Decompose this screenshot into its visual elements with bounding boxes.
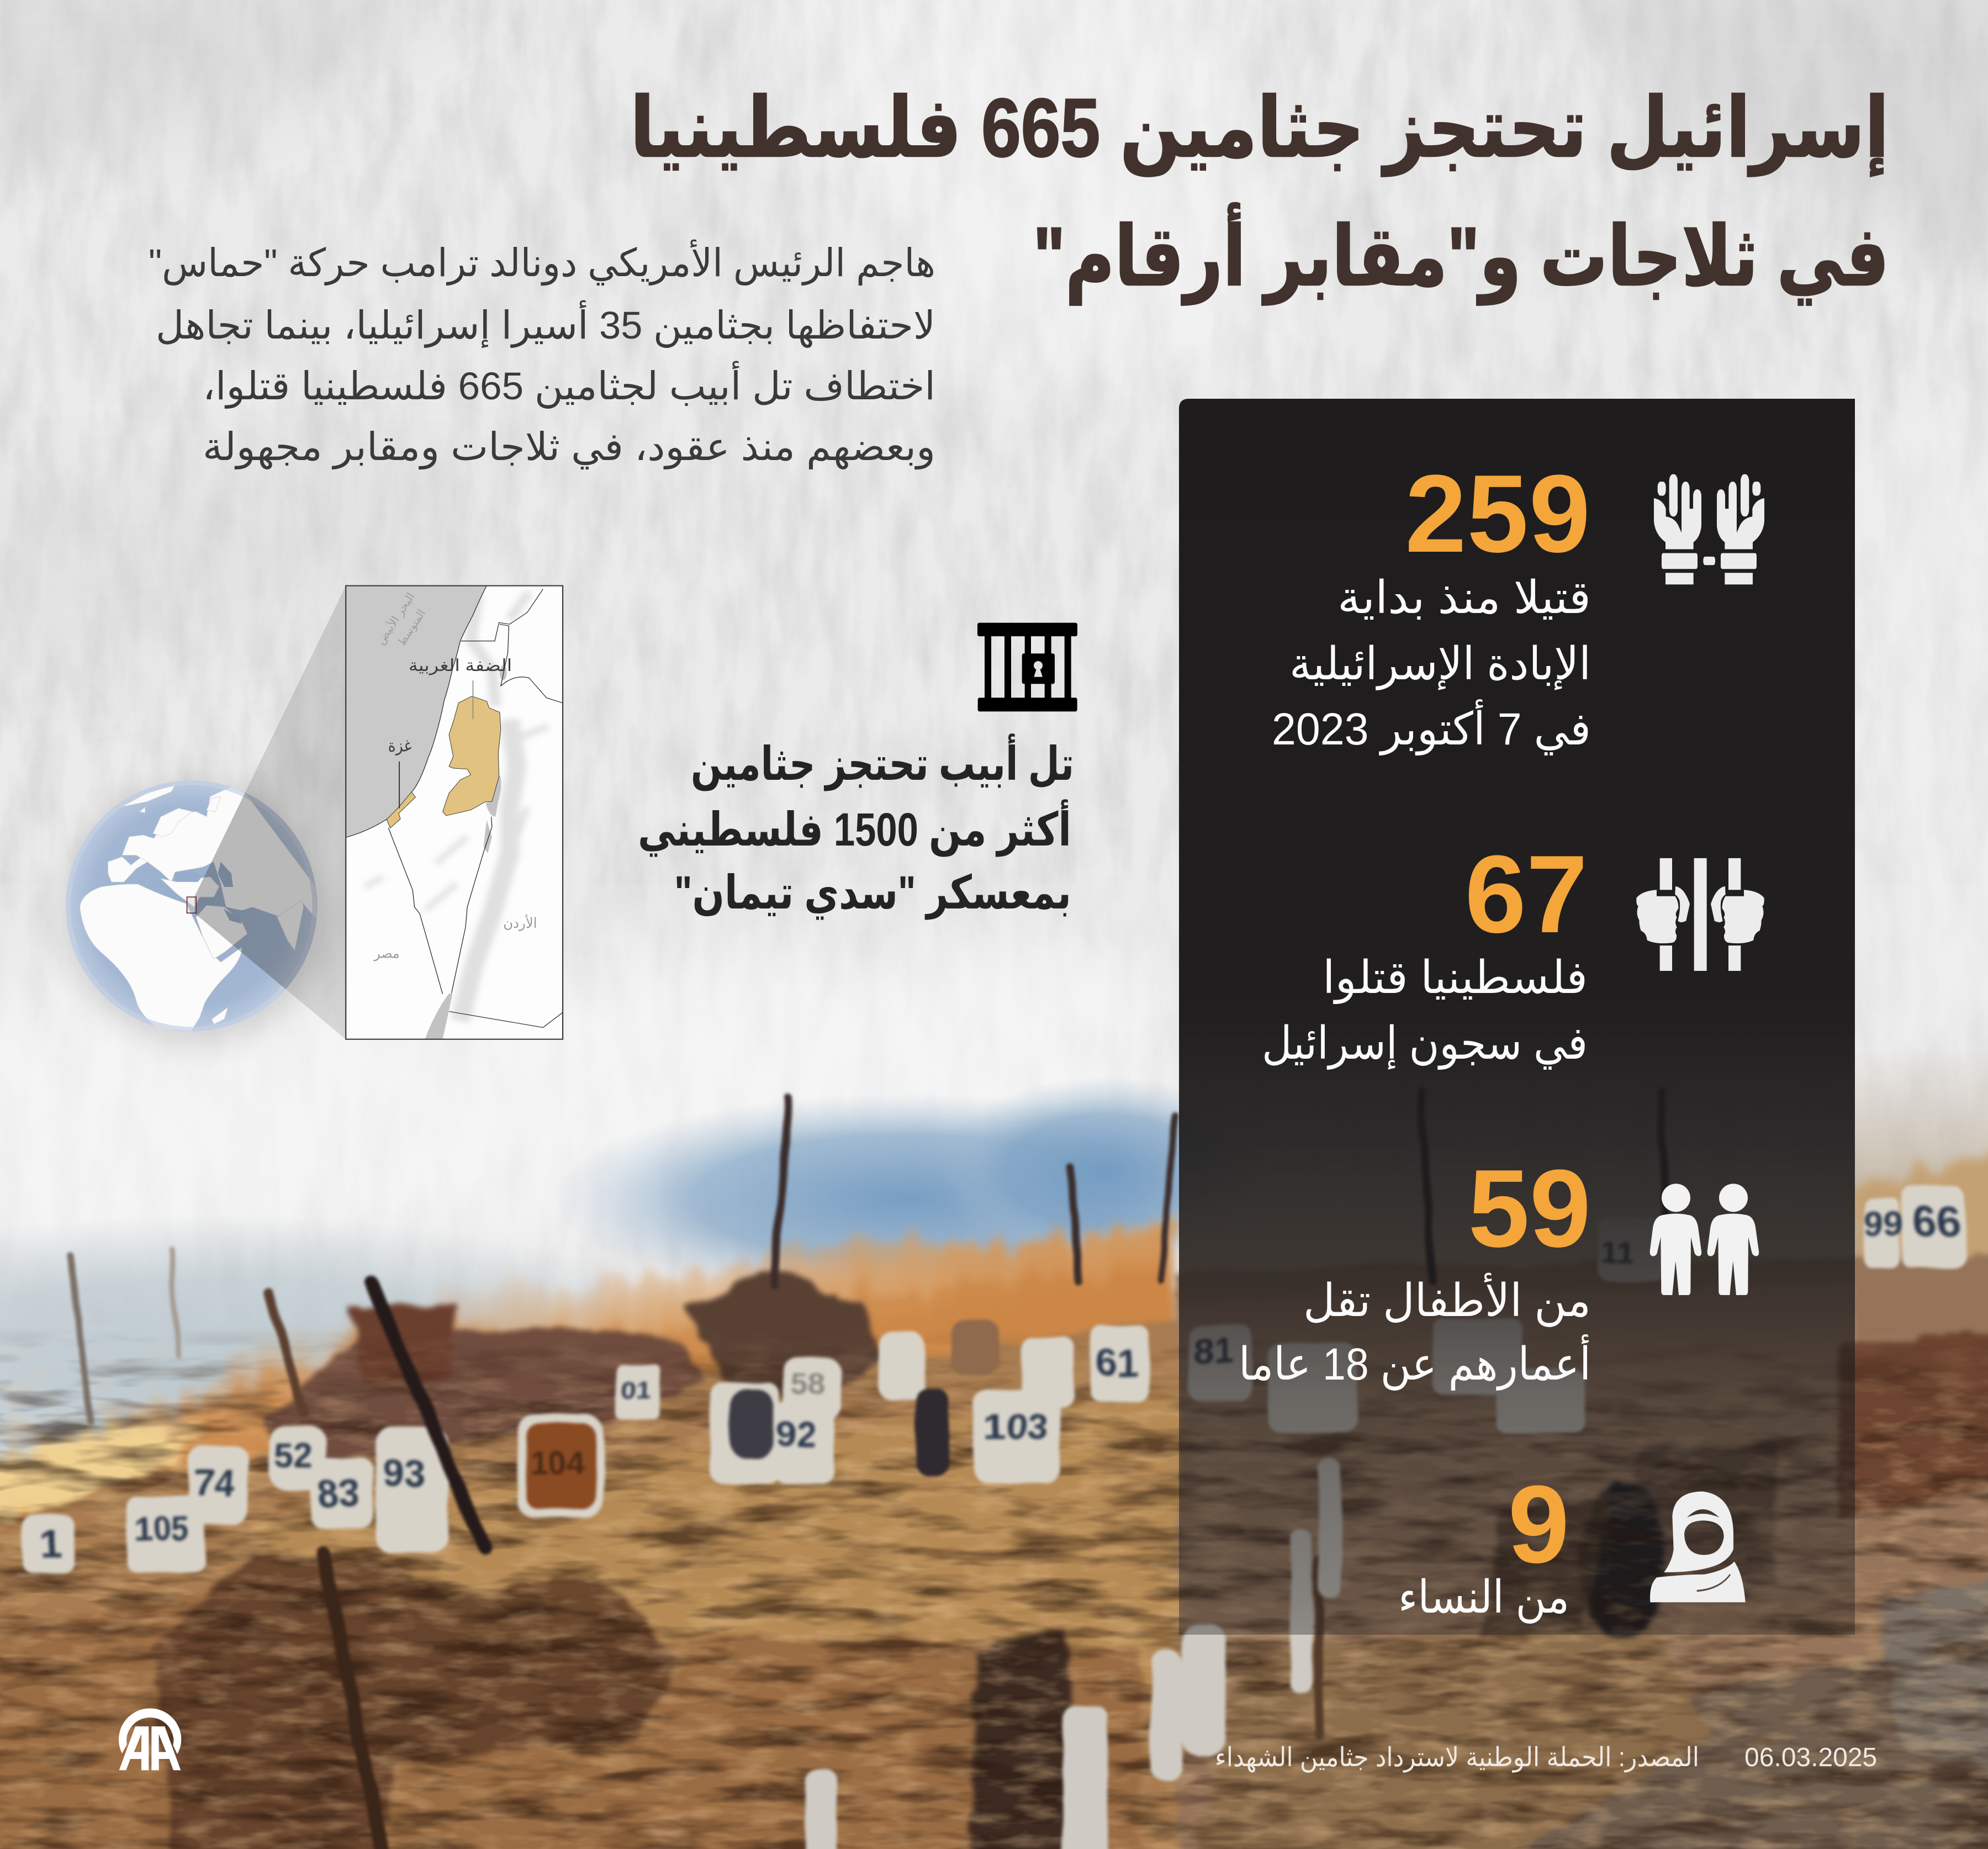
background: painted cemetery landscape: 61 [1096, 1341, 1138, 1384]
title: إسرائيل تحتجز جثامين 665 فلسطينيا [630, 81, 1889, 177]
background: painted cemetery landscape [0, 1049, 1988, 1849]
background: painted cemetery landscape: 83 [317, 1472, 359, 1515]
globe and locator map [64, 586, 563, 1044]
background: painted cemetery landscape: 1 [40, 1523, 62, 1565]
stat 3 number: 59 [1468, 1147, 1591, 1270]
intro paragraph: لاحتفاظها بجثامين 35 أسيرا إسرائيليا، بينما تجاهل [156, 300, 935, 348]
background: painted cemetery landscape: 81 [1194, 1331, 1234, 1371]
stat 3 label [1239, 1273, 1591, 1391]
intro paragraph: هاجم الرئيس الأمريكي دونالد ترامب حركة "حماس" [149, 239, 935, 286]
background: painted cemetery landscape: 52 [274, 1435, 313, 1475]
icon: hands gripping prison bars [1636, 858, 1764, 971]
stat 2 label: في سجون إسرائيل [1262, 1018, 1588, 1070]
grave markers [23, 1186, 1965, 1572]
callout: Sde Teiman detainees [638, 733, 1074, 920]
background: painted cemetery landscape: 99 [1864, 1205, 1904, 1244]
stat 2 label [1262, 953, 1588, 1070]
stat 4 number: 9 [1508, 1463, 1569, 1586]
stat 1 label [1272, 573, 1591, 756]
stat 1 label: قتيلا منذ بداية [1337, 573, 1591, 623]
map label: Mediterranean [373, 590, 428, 648]
icon: two children [1650, 1184, 1759, 1295]
background: painted cemetery landscape: 103 [984, 1405, 1048, 1447]
stat 3 label: أعمارهم عن 18 عاما [1239, 1334, 1591, 1391]
background: painted cemetery landscape: 93 [383, 1452, 425, 1494]
map label: Mediterranean: البحر الأبيض [373, 590, 417, 647]
icon: locked cell bars [977, 623, 1077, 711]
background: painted cemetery landscape: 104 [530, 1444, 585, 1481]
stat 1 number: 259 [1405, 452, 1591, 575]
background: painted cemetery landscape: 58 [791, 1367, 825, 1402]
intro paragraph [149, 239, 935, 470]
icon: veiled woman [1650, 1492, 1746, 1602]
background: painted cemetery landscape: 01 [621, 1375, 649, 1404]
map label: Egypt: مصر [373, 946, 400, 961]
West Bank [443, 696, 501, 816]
source line: المصدر: الحملة الوطنية لاسترداد جثامين الشهداء [1215, 1743, 1699, 1773]
icon: handcuffed hands [1654, 474, 1764, 584]
globe [66, 586, 346, 1039]
callout: Sde Teiman detainees: بمعسكر "سدي تيمان" [674, 867, 1071, 920]
globe shadow [64, 780, 328, 1044]
Mediterranean Sea [346, 586, 487, 837]
callout: Sde Teiman detainees: أكثر من 1500 فلسطيني [638, 799, 1071, 857]
background: painted cemetery landscape: 92 [776, 1413, 816, 1453]
stat 2 number: 67 [1465, 833, 1588, 956]
ground base [0, 1255, 1988, 1849]
stat 4 label: من النساء [1398, 1572, 1569, 1624]
map panel [346, 586, 563, 1039]
map label: Mediterranean: المتوسط [395, 607, 428, 648]
logo: Anadolu Agency [119, 1708, 181, 1770]
map label: Jordan: الأردن [503, 914, 537, 931]
stat 3 label: من الأطفال تقل [1303, 1273, 1591, 1327]
white posts [806, 1458, 1341, 1849]
stat 2 label: فلسطينيا قتلوا [1323, 953, 1588, 1004]
intro paragraph: وبعضهم منذ عقود، في ثلاجات ومقابر مجهولة [203, 425, 935, 470]
date: 06.03.2025 [1744, 1743, 1877, 1772]
Gaza [387, 792, 415, 828]
background: painted cemetery landscape: 66 [1912, 1197, 1960, 1246]
map label: West Bank: الضفة الغربية [409, 656, 512, 675]
wooden crosses [70, 1091, 1667, 1849]
panel: dark statistics panel [1179, 399, 1855, 1635]
background: painted cemetery landscape: 105 [134, 1511, 189, 1548]
background: painted cemetery landscape: 74 [193, 1462, 235, 1504]
callout: Sde Teiman detainees: تل أبيب تحتجز جثامين [691, 733, 1074, 791]
background: painted cemetery landscape: 11 [1600, 1234, 1632, 1269]
zoom cone [194, 586, 346, 1039]
map label: Gaza: غزة [388, 736, 411, 756]
stat 1 label: الإبادة الإسرائيلية [1289, 639, 1591, 691]
title [630, 81, 1889, 305]
stat 1 label: في 7 أكتوبر 2023 [1272, 699, 1591, 756]
intro paragraph: اختطاف تل أبيب لجثامين 665 فلسطينيا قتلوا، [203, 361, 935, 409]
globe locator box [187, 897, 196, 913]
